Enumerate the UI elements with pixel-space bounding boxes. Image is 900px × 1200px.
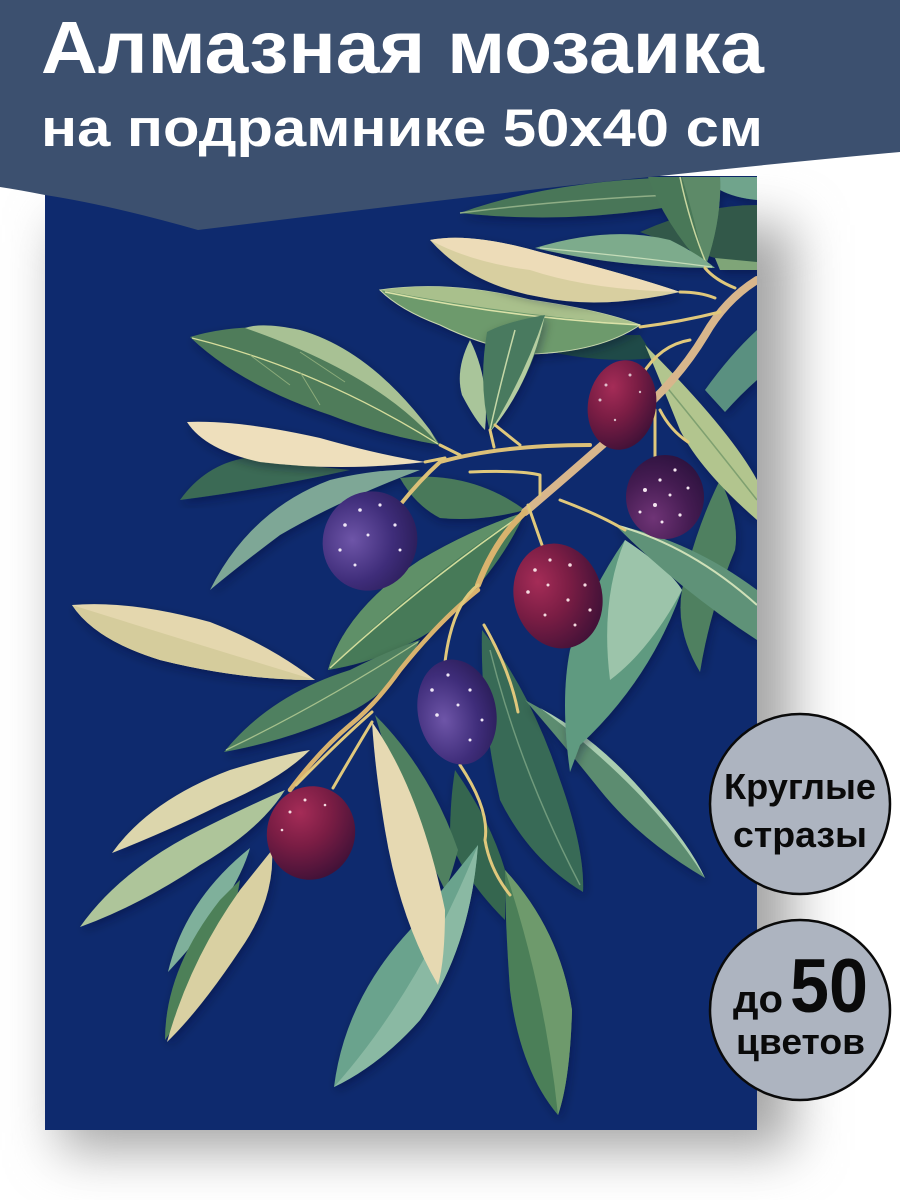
leaf: cream upper [430,238,680,302]
leaf: big upper left [190,325,440,445]
olive: centre crimson [513,544,603,648]
leaf: green upper [380,287,640,354]
leaf: dark left [180,458,350,500]
olive: upper right purple [626,455,704,539]
badge: up to 50 colours: 50 [790,944,868,1029]
artwork: olive branch [72,177,757,1115]
badge: round rhinestones: стразы [733,814,867,855]
title line 1: Алмазная мозаика [41,6,765,89]
leaf: right lower long [525,700,705,878]
leaf: pale teal left [210,470,525,590]
canvas background [45,176,757,1130]
leaf: green lower left [224,640,420,752]
leaves right side [565,330,757,772]
small leaves centre [460,315,545,432]
leaf: cream far left [72,604,315,680]
leaf: large centre [328,512,525,670]
branch and stems [290,268,757,895]
olive: upper maroon [588,360,656,450]
badge: round rhinestones: Круглые [724,766,876,807]
badge: round rhinestones [710,714,890,894]
dark leaf under centre [556,335,650,360]
canvas drop shadow [60,225,792,1150]
badge: up to 50 colours: цветов [736,1021,865,1062]
leaf: dark centre long [482,630,583,892]
olive: left violet [322,491,418,591]
leaves upper right [460,177,757,270]
header banner [0,0,900,230]
badge: up to 50 colours: до [733,979,783,1021]
leaves bottom centre [334,715,572,1115]
badge: up to 50 colours [710,920,890,1100]
title line 2: на подрамнике 50х40 см [41,99,763,158]
olive: lower crimson [266,786,356,880]
olive: centre violet [417,660,497,764]
leaves bottom left cluster [80,750,310,1042]
leaf: cream left [187,422,425,467]
